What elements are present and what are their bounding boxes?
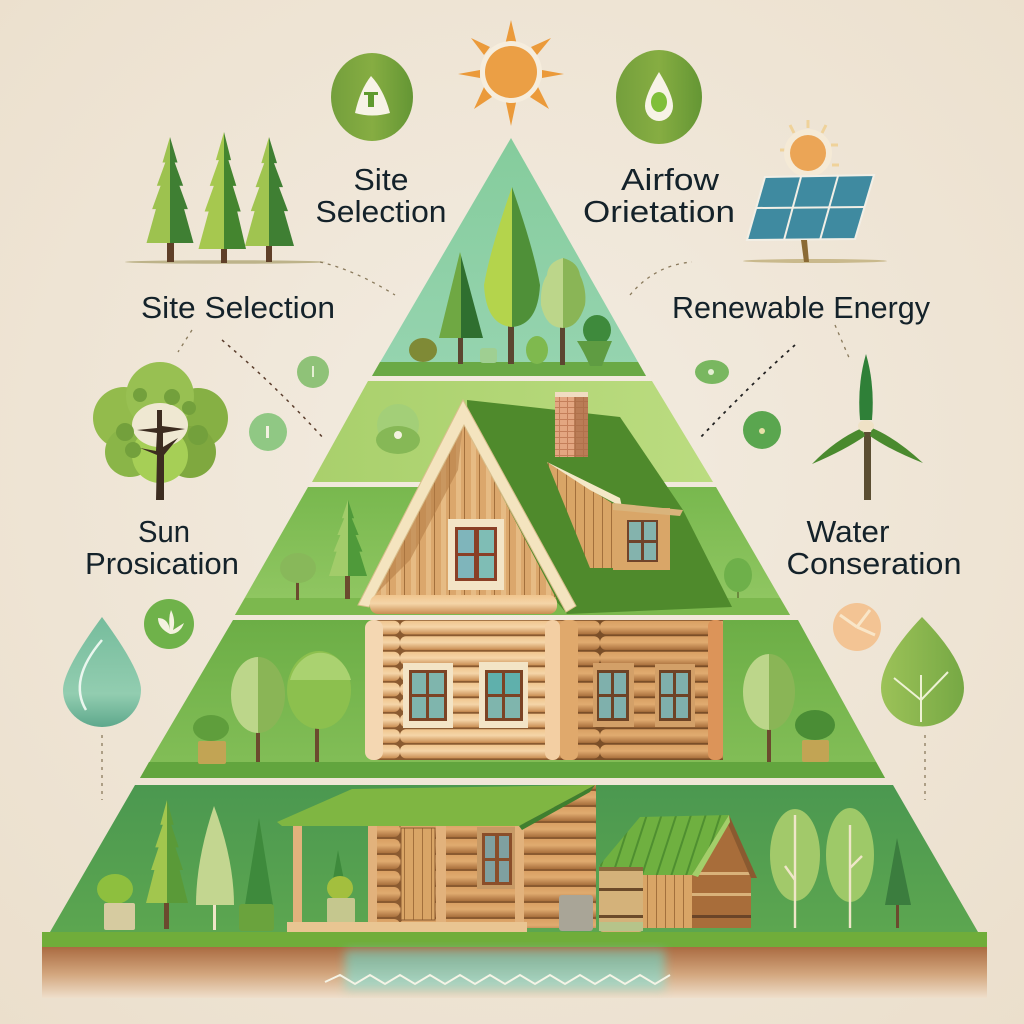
- icon: left potted plant: [97, 874, 135, 930]
- icon: site selection badge: [331, 53, 413, 141]
- cabin: shed: [599, 815, 757, 928]
- icon: narrow conifer: [885, 838, 911, 928]
- cabin: ground floor logs: [365, 620, 723, 760]
- icon: solar panel with sun: [743, 120, 887, 263]
- icon: small leaf dots: [249, 356, 781, 451]
- grey barrel: [559, 895, 593, 931]
- icon: potted plant: [193, 715, 229, 764]
- icon: pale cone tree: [196, 806, 234, 930]
- panel: pyramid tier 3: [235, 487, 790, 615]
- heading: Water Conservation: [786, 514, 962, 581]
- icon: center potted plant: [327, 850, 355, 923]
- icon: shrub: [724, 558, 752, 598]
- heading: Site Selection left: Site Selection: [141, 290, 335, 325]
- window: [477, 827, 517, 889]
- panel: ground and soil: [42, 932, 987, 998]
- window: [479, 662, 528, 728]
- icon: bushes: [409, 315, 612, 366]
- icon: round tree: [541, 258, 585, 365]
- icon: round leafy tree: [93, 362, 228, 500]
- icon: leaf emblem: [376, 404, 420, 454]
- cabin: porch: [277, 785, 596, 932]
- window: [655, 664, 695, 727]
- cabin: dormer: [547, 462, 683, 570]
- log beam: [370, 595, 557, 614]
- heading: Sun Prosication: Sun: [138, 514, 190, 549]
- panel: pyramid tier 2: [312, 381, 713, 482]
- porch roof: [277, 785, 595, 826]
- gable window: [448, 519, 504, 590]
- icon: round tree: [231, 657, 285, 762]
- cabin: front gable: [358, 400, 576, 614]
- deck: [287, 922, 527, 932]
- window: [403, 663, 453, 728]
- panel: pyramid tier 5: [50, 785, 978, 932]
- heading: Airflow Orientation: Orietation: [583, 194, 735, 229]
- icon: conifer: [439, 252, 483, 364]
- icon: wind turbine: [812, 354, 923, 500]
- icon: bush: [280, 553, 316, 600]
- icon: conifer: [329, 500, 367, 599]
- icon: seedling badge: [144, 599, 194, 649]
- heading: Renewable Energy: Renewable Energy: [672, 290, 930, 325]
- icon: potted cone tree: [239, 818, 274, 931]
- heading: Sun Prosication: Prosication: [85, 546, 239, 581]
- posts: [293, 825, 524, 925]
- door: [401, 828, 435, 920]
- icon: green leaf: [881, 617, 964, 726]
- cabin: chimney: [555, 392, 588, 457]
- window: [593, 663, 634, 727]
- panel: pyramid tier 4: [140, 620, 885, 778]
- icon: three evergreen trees: [125, 132, 325, 264]
- heading: Site Selection top: Selection: [316, 194, 446, 229]
- heading: Airflow Orientation: [583, 162, 735, 229]
- connector lines: [102, 262, 925, 800]
- icon: round tree right: [743, 654, 795, 762]
- sun icon: [458, 20, 564, 126]
- cabin: green roof: [467, 400, 732, 614]
- heading: Site Selection top: [316, 162, 446, 229]
- icon: right oval trees: [770, 808, 874, 928]
- heading: Water Conservation: Conseration: [786, 546, 962, 581]
- heading: Sun Prosication: [85, 514, 239, 581]
- icon: potted plant right: [795, 710, 835, 762]
- icon: water drop: [63, 617, 141, 727]
- icon: stacked conifer: [146, 800, 188, 929]
- icon: two-tone tree: [287, 651, 351, 762]
- heading: Water Conservation: Water: [806, 514, 890, 549]
- cabin: water barrel: [599, 867, 643, 932]
- panel: pyramid tier 1 forest: [372, 138, 646, 376]
- icon: orange flower: [833, 603, 881, 651]
- heading: Airflow Orientation: Airfow: [621, 162, 720, 197]
- water table: [325, 950, 670, 990]
- icon: tall tree: [484, 187, 540, 364]
- heading: Site Selection top: Site: [354, 162, 408, 197]
- icon: airflow badge: [616, 50, 702, 144]
